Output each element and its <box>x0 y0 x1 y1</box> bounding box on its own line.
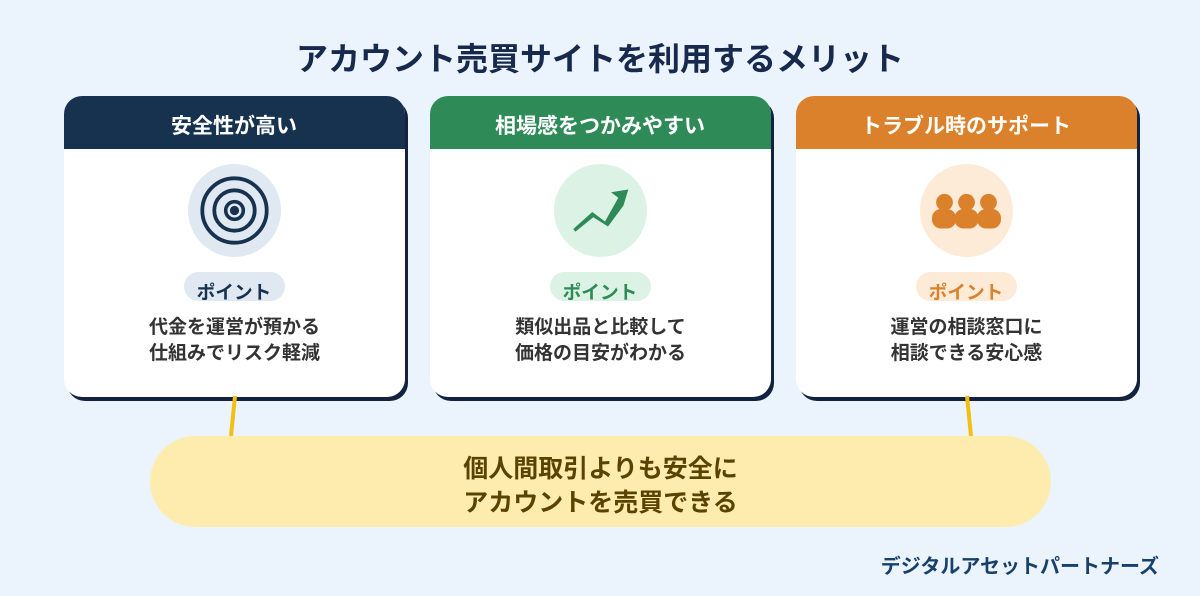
panel heading: safety <box>64 96 405 149</box>
icon: three people <box>920 164 1013 257</box>
text block: support point <box>890 316 1042 364</box>
panel: safety <box>64 96 405 397</box>
text block: safety point <box>149 316 320 364</box>
title: アカウント売買サイトを利用するメリット <box>296 41 904 77</box>
panel: market price <box>430 96 771 397</box>
point badge <box>184 272 285 301</box>
text block: support point: 相談できる安心感 <box>891 343 1042 364</box>
callout banner: アカウントを売買できる <box>463 489 738 517</box>
text block: market point: 類似出品と比較して <box>515 317 686 338</box>
text block: market point <box>515 316 686 364</box>
text block: market point: 価格の目安がわかる <box>515 343 686 364</box>
connector: right card to banner <box>965 396 973 436</box>
callout banner: 個人間取引よりも安全に <box>463 455 738 483</box>
point badge <box>550 272 651 301</box>
icon: rising chart arrow <box>554 164 647 257</box>
callout banner <box>150 436 1051 527</box>
panel heading: trouble support: トラブル時のサポート <box>861 115 1071 138</box>
connector: left card to banner <box>229 396 237 436</box>
panel: trouble support <box>796 96 1137 397</box>
panel heading: safety: 安全性が高い <box>171 115 297 138</box>
point badge <box>916 272 1017 301</box>
text block: safety point: 仕組みでリスク軽減 <box>149 343 320 364</box>
panel heading: trouble support <box>796 96 1137 149</box>
footer brand name: デジタルアセットパートナーズ <box>881 556 1159 578</box>
panel heading: market price: 相場感をつかみやすい <box>495 115 705 138</box>
text block: safety point: 代金を運営が預かる <box>149 317 320 338</box>
icon: target <box>188 164 281 257</box>
panel heading: market price <box>430 96 771 149</box>
text block: support point: 運営の相談窓口に <box>890 317 1042 338</box>
